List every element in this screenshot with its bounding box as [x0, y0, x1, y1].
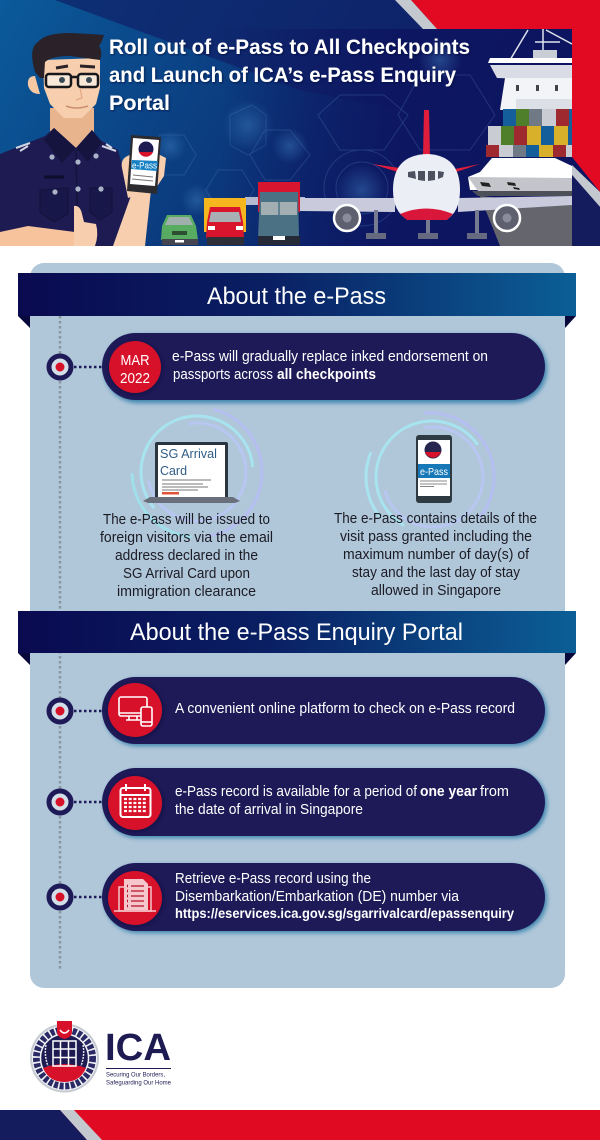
red corner with silver stripe	[395, 0, 600, 246]
timeline row: online platform	[49, 677, 547, 746]
title: and Launch of ICA’s e-Pass Enquiry	[109, 63, 456, 87]
heading ribbon: about the e-Pass: About the e-Pass	[207, 283, 386, 310]
officer illustration	[0, 33, 166, 246]
pill: MAR	[120, 353, 150, 369]
ship	[468, 29, 572, 246]
rings	[117, 392, 277, 552]
header banner	[0, 0, 600, 246]
heading ribbon: about the enquiry portal: About the e-Pass Enquiry Portal	[130, 619, 463, 646]
laptop caption: foreign visitors via the email	[100, 530, 273, 546]
ICA wordmark and tagline	[105, 1027, 171, 1086]
footer band	[0, 1110, 600, 1140]
title: Roll out of e-Pass to All Checkpoints	[109, 35, 470, 59]
pill: one year	[420, 784, 477, 800]
title: Portal	[109, 91, 170, 115]
phone caption: maximum number of day(s) of	[343, 547, 530, 563]
pill: A convenient online platform to check on e-Pass record	[175, 701, 515, 717]
icon: calendar	[120, 784, 150, 817]
timeline marker	[49, 356, 102, 378]
pill: 2022	[120, 371, 150, 387]
laptop caption: The e-Pass will be issued to	[103, 512, 270, 528]
icon: document	[114, 879, 156, 911]
pill	[102, 333, 547, 403]
pill: Retrieve e-Pass record using the	[175, 871, 371, 887]
ICA wordmark and tagline: Safeguarding Our Home	[106, 1080, 171, 1086]
pill: e-Pass will gradually replace inked endorsement on	[172, 349, 488, 365]
pill: e-Pass record is available for a period of	[175, 784, 418, 800]
phone caption: The e-Pass contains details of the	[334, 511, 537, 527]
ICA wordmark and tagline: ICA	[105, 1027, 171, 1069]
network glows	[154, 38, 462, 216]
pill: Disembarkation/Embarkation (DE) number via	[175, 889, 460, 905]
pill: from	[480, 784, 509, 800]
blue truck	[258, 182, 300, 245]
rings	[340, 387, 520, 567]
laptop caption: SG Arrival Card upon	[123, 566, 250, 582]
laptop caption: address declared in the	[115, 548, 258, 564]
phone in hand	[127, 135, 161, 194]
laptop caption	[100, 512, 273, 600]
phone caption: visit pass granted including the	[340, 529, 532, 545]
laptop: SG Arrival	[160, 447, 217, 461]
phone in hand: e-Pass	[132, 160, 157, 170]
timeline marker	[49, 886, 102, 908]
pill: passports across	[173, 367, 273, 383]
timeline dotted line	[59, 316, 61, 970]
yellow truck	[204, 198, 246, 245]
main light blue panel	[30, 263, 565, 988]
pill	[102, 863, 547, 933]
container stacks	[486, 109, 572, 157]
icon: monitor and phone	[119, 697, 152, 726]
plane wing behind trucks	[245, 197, 305, 205]
heading ribbon: about the enquiry portal	[18, 611, 576, 665]
phone caption	[334, 511, 537, 599]
phone	[416, 435, 452, 503]
network hexagon background	[148, 75, 495, 226]
laptop: Card	[160, 464, 187, 478]
heading ribbon: about the e-Pass	[18, 273, 576, 328]
phone caption: allowed in Singapore	[371, 583, 501, 599]
pill	[102, 768, 547, 838]
pill: https://eservices.ica.gov.sg/sgarrivalcard/epassenquiry	[175, 906, 514, 921]
laptop caption: immigration clearance	[117, 584, 256, 600]
ICA wordmark and tagline: Securing Our Borders,	[106, 1072, 165, 1078]
pill: all checkpoints	[277, 367, 376, 383]
timeline row: one year availability	[49, 768, 547, 838]
laptop column	[100, 392, 277, 600]
laptop	[143, 442, 240, 503]
timeline row: retrieve record	[49, 863, 547, 933]
phone column	[334, 387, 537, 599]
timeline marker	[49, 791, 102, 813]
green car	[161, 215, 198, 245]
pill: the date of arrival in Singapore	[175, 802, 363, 818]
timeline row: March 2022	[49, 333, 547, 403]
pill	[102, 677, 547, 746]
ICA crest	[30, 1021, 99, 1092]
title	[109, 35, 470, 115]
phone: e-Pass	[420, 466, 448, 478]
phone caption: stay and the last day of stay	[352, 565, 521, 581]
timeline marker	[49, 700, 102, 722]
airplane	[300, 110, 572, 238]
